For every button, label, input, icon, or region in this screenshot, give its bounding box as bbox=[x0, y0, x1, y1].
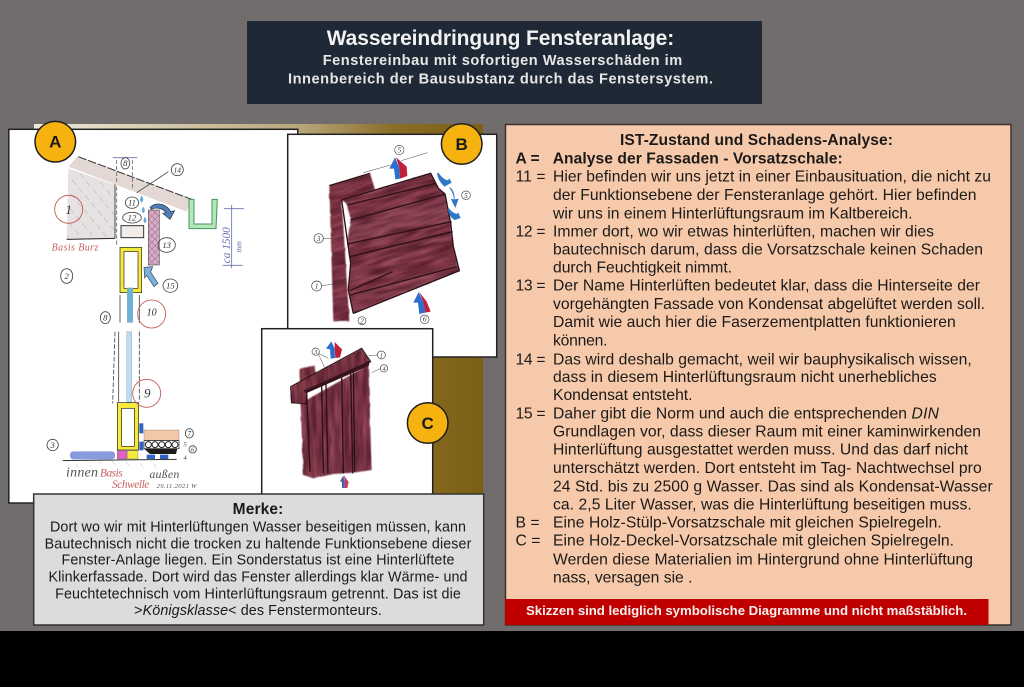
item B: Eine Holz-Stülp-Vorsatzschale mit gleichen Spielregeln. bbox=[553, 515, 942, 532]
item C bbox=[516, 533, 973, 587]
item 12: durch Feuchtigkeit nimmt. bbox=[553, 260, 732, 277]
item C: C = bbox=[516, 533, 540, 550]
threshold build-up bbox=[139, 423, 179, 459]
item 11: 11 = bbox=[516, 169, 546, 186]
callout: Merke bbox=[34, 494, 484, 625]
item 15: ca. 2,5 Liter Wasser, was die Hinterlüftung beseitigen muss. bbox=[553, 497, 972, 514]
item 15: Hinterlüftung ausgestattet werden muss. Und das darf nicht bbox=[553, 442, 969, 459]
title block: Innenbereich der Bausubstanz durch das Fenstersystem. bbox=[288, 71, 713, 87]
sketch numbers: 7 bbox=[187, 429, 191, 438]
air arrow 15 bbox=[144, 267, 158, 287]
dimension label: ca 1500 bbox=[221, 227, 233, 263]
sketch numbers: 2 bbox=[65, 271, 70, 281]
drop leader line bbox=[137, 172, 168, 193]
item 15 bbox=[516, 405, 993, 514]
item B: B = bbox=[516, 515, 539, 532]
handwritten notes: außen bbox=[149, 467, 179, 481]
item 14: dass in diesem Hinterlüftungsraum nicht unerhebliches bbox=[553, 369, 937, 386]
callout: Merke: Fenster-Anlage liegen. Ein Sonderstatus ist eine Hinterlüftete bbox=[62, 552, 455, 568]
badge A: A bbox=[49, 133, 61, 152]
gold gradient backdrop bbox=[34, 124, 483, 496]
item C: nass, versagen sie . bbox=[553, 570, 692, 587]
callout: Merke: Feuchtetechnisch vom Hinterlüftungsraum getrennt. Das ist die bbox=[55, 586, 461, 602]
item 14: Kondensat entsteht. bbox=[553, 387, 692, 404]
item 15: DIN bbox=[912, 405, 940, 422]
callout: Merke: Klinkerfassade. Dort wird das Fenster allerdings klar Wärme- und bbox=[48, 570, 468, 586]
blue water arrows bbox=[437, 173, 461, 220]
sketch numbers: 1 bbox=[66, 203, 72, 217]
sketch numbers: 10 bbox=[147, 307, 157, 318]
leader lines bbox=[318, 353, 380, 373]
wood block bbox=[121, 226, 144, 238]
small number circles bbox=[312, 348, 388, 372]
item 15: Grundlagen vor, dass dieser Raum mit einer kaminwirkenden bbox=[553, 424, 981, 441]
dimension label: mm bbox=[234, 241, 243, 253]
item 14: 14 = bbox=[516, 351, 546, 368]
callout: Merke: Bautechnisch nicht die trocken zu haltende Funktionsebene dieser bbox=[45, 536, 472, 552]
handwritten notes: 29.11.2021 W bbox=[157, 483, 198, 490]
badge A bbox=[35, 121, 76, 162]
sketch numbers: 15 bbox=[166, 281, 175, 291]
roof facing board bbox=[68, 157, 192, 212]
black footer band bbox=[0, 631, 1024, 687]
sketch numbers: 3 bbox=[313, 349, 318, 356]
sketch numbers bbox=[313, 349, 386, 373]
sketch numbers: 1 bbox=[380, 352, 383, 359]
glass pane bbox=[127, 288, 133, 402]
red circled numbers bbox=[55, 195, 166, 407]
item 13: 13 = bbox=[516, 278, 546, 295]
callout: Merke: Merke: bbox=[233, 501, 283, 518]
item 15: Daher gibt die Norm und auch die entsprechenden bbox=[553, 405, 907, 422]
air arrow top bbox=[326, 341, 342, 359]
item 11: Hier befinden wir uns jetzt in einer Einbausituation, die nicht zu bbox=[553, 169, 991, 186]
red disclaimer bar: Skizzen sind lediglich symbolische Diagramme und nicht maßstäblich. bbox=[526, 603, 967, 618]
analysis heading: IST-Zustand und Schadens-Analyse: bbox=[620, 132, 893, 149]
small number circles bbox=[47, 158, 196, 453]
plank shadow lines bbox=[329, 173, 459, 313]
small number circles bbox=[312, 145, 470, 325]
floor with rubble bbox=[63, 451, 177, 467]
item 12: 12 = bbox=[516, 223, 546, 240]
panel B: wooden clapboard sketch bbox=[288, 134, 499, 357]
sketch numbers: 12 bbox=[128, 212, 137, 222]
sketch numbers: 2 bbox=[360, 316, 364, 325]
callout: Merke: >Königsklasse< des Fenstermonteurs. bbox=[134, 603, 382, 619]
board joints bbox=[291, 348, 371, 473]
vertical boards with battens bbox=[291, 348, 372, 478]
panel A: window section sketch bbox=[9, 129, 298, 503]
title block bbox=[247, 21, 762, 104]
sketch numbers: 11 bbox=[128, 197, 136, 207]
item 12: bautechnisch darum, dass die Vorsatzschale keinen Schaden bbox=[553, 242, 983, 258]
item 15: 24 Std. bis zu 2500 g Wasser. Das sind als Kondensat-Wasser bbox=[553, 478, 993, 495]
sketch numbers: 6 bbox=[423, 315, 427, 324]
badge B: B bbox=[456, 135, 468, 154]
sketch numbers: 9 bbox=[144, 386, 151, 400]
item 12 bbox=[516, 223, 983, 277]
sketch numbers bbox=[315, 146, 468, 325]
upper window frame bbox=[120, 247, 142, 293]
lower window frame bbox=[117, 403, 139, 459]
sketch numbers: 14 bbox=[174, 165, 181, 174]
sketch numbers: 5 bbox=[464, 191, 468, 200]
badge C: C bbox=[422, 414, 434, 433]
handwritten notes bbox=[52, 242, 198, 491]
item C: Werden diese Materialien im Hintergrund ohne Hinterlüftung bbox=[553, 551, 973, 568]
sketch numbers: 1 bbox=[315, 282, 319, 291]
window outline lines bbox=[113, 160, 139, 403]
callout: Merke: Dort wo wir mit Hinterlüftungen Wasser beseitigen müssen, kann bbox=[50, 520, 466, 536]
item 13: Der Name Hinterlüften bedeutet klar, dass die Hinterseite der bbox=[553, 278, 980, 295]
sketch numbers: 8 bbox=[123, 158, 128, 168]
item 13: können. bbox=[553, 332, 608, 350]
sketch numbers: 5 bbox=[183, 442, 187, 449]
item C: Eine Holz-Deckel-Vorsatzschale mit gleichen Spielregeln. bbox=[553, 533, 954, 550]
air arrow bottom bbox=[340, 475, 349, 488]
title block: Fenstereinbau mit sofortigen Wasserschäden im bbox=[323, 53, 682, 69]
item 11: der Funktionsebene der Fensteranlage gehört. Hier befinden bbox=[553, 187, 976, 204]
air arrow bottom bbox=[413, 292, 431, 314]
sketch numbers: 4 bbox=[382, 366, 386, 373]
badge C bbox=[407, 403, 448, 443]
handwritten notes: innen bbox=[66, 466, 98, 481]
handwritten notes: Schwelle bbox=[112, 479, 149, 491]
gutter bbox=[189, 199, 217, 229]
section A heading: Analyse der Fassaden - Vorsatzschale: bbox=[553, 150, 843, 167]
lattice board 13 bbox=[148, 210, 159, 265]
dimension label bbox=[221, 227, 243, 263]
item 12: Immer dort, wo wir etwas hinterlüften, machen wir dies bbox=[553, 223, 934, 240]
item 15: 15 = bbox=[516, 405, 546, 422]
badge B bbox=[441, 124, 482, 164]
item 13: vorgehängten Fassade von Kondensat abgelüftet werden soll. bbox=[553, 296, 985, 313]
handwritten notes: Basis bbox=[100, 468, 123, 480]
title block: Wassereindringung Fensteranlage: bbox=[327, 27, 674, 50]
leader lines bbox=[322, 153, 427, 286]
panel C: wooden board-and-batten sketch bbox=[262, 329, 433, 499]
item 13: Damit wie auch hier die Faserzementplatten funktionieren bbox=[553, 314, 956, 331]
water drops bbox=[140, 195, 146, 223]
wood siding with post bbox=[290, 139, 499, 356]
item 11: wir uns in einem Hinterlüftungsraum im Kaltbereich. bbox=[552, 205, 912, 222]
item 15: unterschätzt werden. Dort entsteht im Tag- Nachtwechsel pro bbox=[553, 460, 982, 477]
item 14: Das wird deshalb gemacht, weil wir bauphysikalisch wissen, bbox=[553, 351, 972, 368]
sketch numbers: 13 bbox=[162, 240, 172, 250]
sketch numbers: 3 bbox=[50, 440, 56, 450]
item 14 bbox=[516, 351, 972, 404]
sketch numbers: 6 bbox=[191, 447, 195, 454]
panel: damage analysis text bbox=[506, 124, 1011, 625]
red disclaimer bar bbox=[505, 599, 988, 625]
sketch numbers: 5 bbox=[397, 146, 401, 155]
sketch numbers bbox=[50, 158, 195, 461]
masonry wall bbox=[67, 168, 115, 239]
sketch numbers: 8 bbox=[103, 313, 108, 323]
sketch numbers: 4 bbox=[183, 454, 187, 461]
sketch numbers: 3 bbox=[316, 234, 321, 243]
handwritten notes: Basis Burz bbox=[52, 242, 98, 253]
curved air arrow bbox=[150, 204, 175, 219]
air arrow top bbox=[389, 157, 407, 179]
item 11 bbox=[516, 169, 991, 222]
dimension line ca 1500 mm bbox=[113, 158, 244, 268]
section A heading: A = bbox=[516, 150, 540, 167]
item 13 bbox=[516, 278, 985, 350]
